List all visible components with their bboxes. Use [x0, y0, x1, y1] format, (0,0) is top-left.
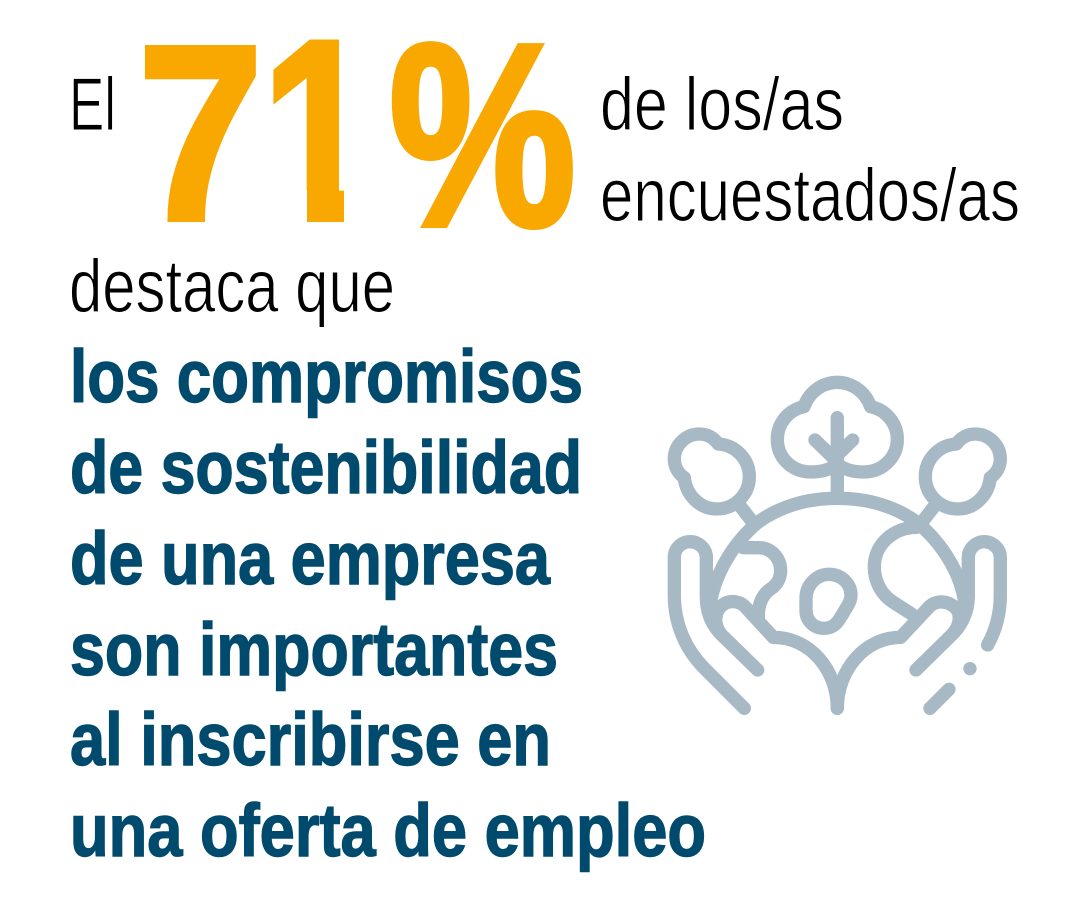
- icon: dot and dash accents: [930, 662, 977, 708]
- highlighted statement: al inscribirse en: [70, 698, 551, 781]
- highlighted statement: [70, 335, 706, 872]
- intro text: de los/as encuestados/as: [600, 62, 1020, 237]
- icon: globe outline and continents: [710, 498, 965, 628]
- highlighted statement: son importantes: [70, 608, 558, 691]
- big number: 71%: [144, 40, 573, 230]
- icon: left tree: [674, 434, 752, 521]
- intro text: destaca que: destaca que: [69, 244, 395, 328]
- intro text: El: El: [69, 62, 116, 146]
- highlighted statement: de una empresa: [70, 517, 551, 600]
- highlighted statement: una oferta de empleo: [70, 789, 706, 872]
- highlighted statement: de sostenibilidad: [70, 426, 582, 509]
- icon: left hand: [674, 542, 837, 708]
- icon: hands holding globe with trees: [674, 382, 1000, 708]
- highlighted statement: los compromisos: [70, 335, 583, 418]
- big number: 71%: 7: [138, 0, 263, 273]
- icon: right hand: [837, 542, 1000, 708]
- icon: centre tree: [777, 382, 897, 498]
- intro text: de los/as encuestados/as: de los/as: [600, 62, 844, 146]
- icon: right tree: [923, 434, 1000, 521]
